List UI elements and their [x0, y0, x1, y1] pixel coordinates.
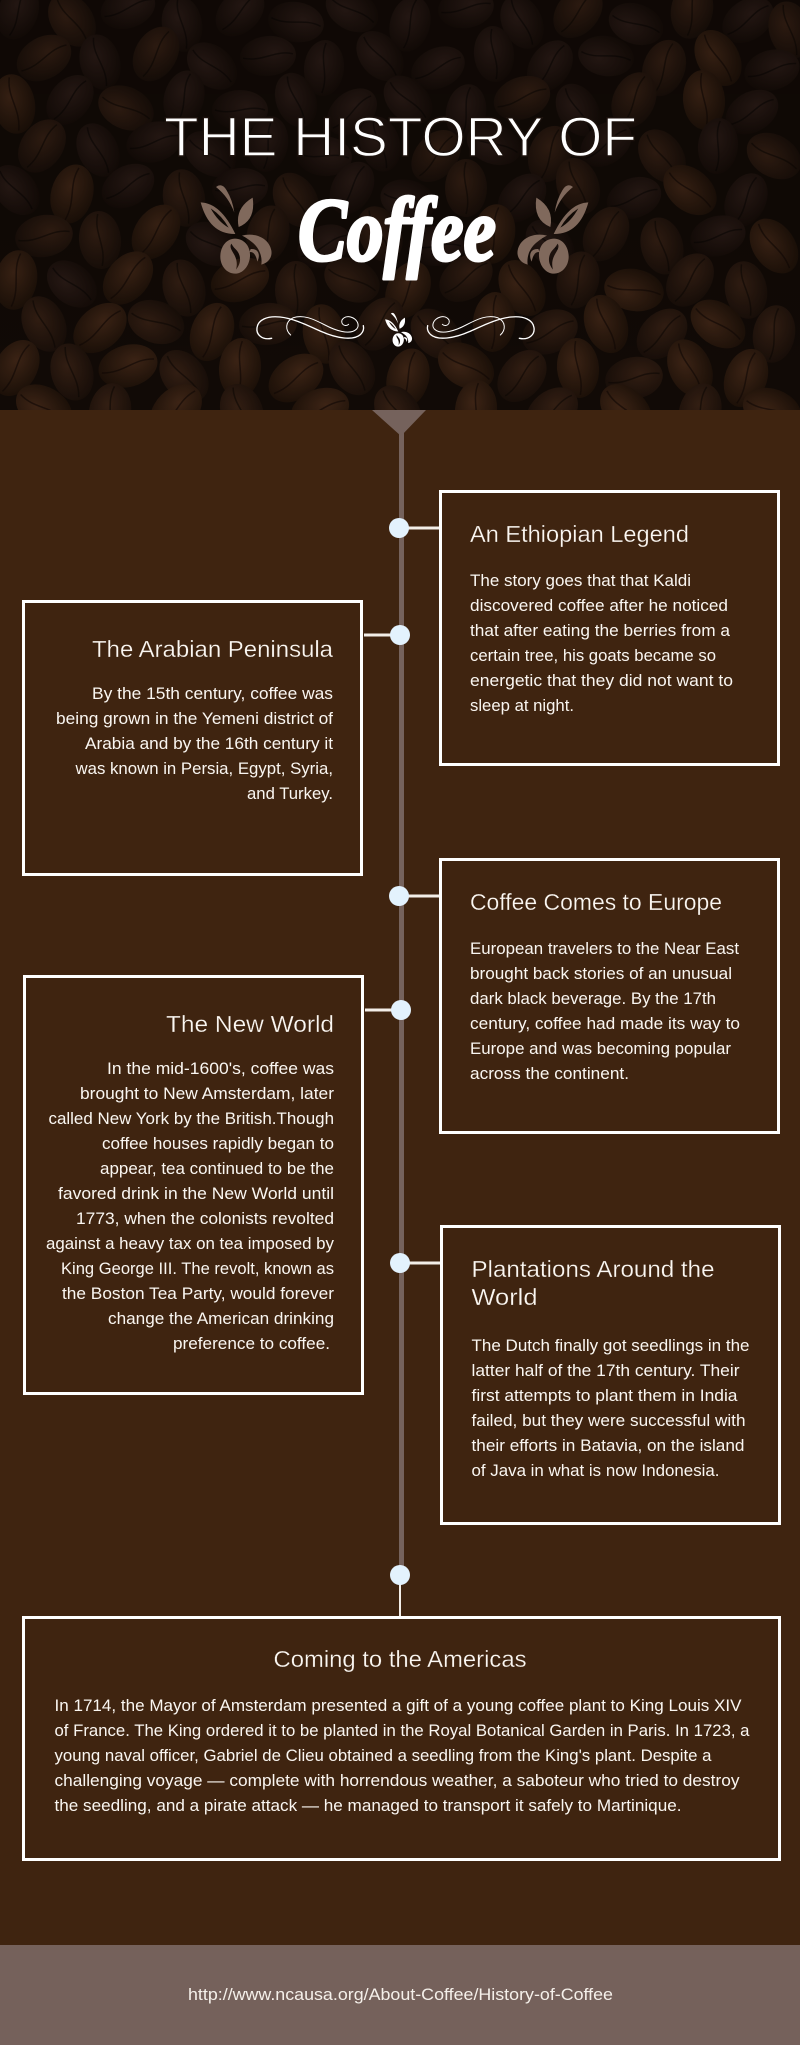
coffee beans texture	[0, 0, 800, 448]
body text: In the mid-1600's, coffee was	[107, 1059, 334, 1078]
body text: of France. The King ordered it to be planted in the Royal Botanical Garden in Paris. In 1723, a	[54, 1721, 750, 1740]
body text: century, coffee had made its way to	[470, 1014, 740, 1033]
body text: was known in Persia, Egypt, Syria,	[75, 759, 333, 778]
body text: first attempts to plant them in India	[472, 1386, 738, 1405]
body text: young naval officer, Gabriel de Clieu obtained a seedling from the King's plant. Despite a	[54, 1746, 712, 1765]
body text: European travelers to the Near East	[470, 939, 739, 958]
main timeline background	[0, 410, 800, 1945]
body text: sleep at night.	[470, 696, 574, 715]
heading: Coming to the Americas	[274, 1646, 526, 1672]
ornament: left flourish	[257, 317, 364, 339]
body text: failed, but they were successful with	[472, 1411, 746, 1430]
body text: In 1714, the Mayor of Amsterdam presented a gift of a young coffee plant to King Louis XIV	[54, 1696, 742, 1715]
body text: the seedling, and a pirate attack — he managed to transport it safely to Martinique.	[54, 1796, 682, 1815]
panel: An Ethiopian Legend	[389, 492, 778, 764]
header: coffee bean photo background with title	[0, 0, 800, 448]
body text: Arabia and by the 16th century it	[85, 734, 333, 753]
heading: An Ethiopian Legend	[470, 521, 689, 547]
footer: source link: http://www.ncausa.org/About-Coffee/History-of-Coffee	[188, 1985, 613, 2004]
body text: of Java in what is now Indonesia.	[472, 1461, 720, 1480]
body text: that after eating the berries from a	[470, 621, 731, 640]
title: The History Of: THE HISTORY OF	[164, 105, 637, 168]
ornament: right flourish	[427, 317, 534, 339]
body text: certain tree, his goats became so	[470, 646, 716, 665]
body text	[54, 1696, 750, 1815]
body text: preference to coffee.	[173, 1334, 330, 1353]
timeline spine with arrowhead	[372, 410, 426, 1568]
body text: By the 15th century, coffee was	[92, 684, 333, 703]
body text	[470, 939, 740, 1083]
icon: left coffee branch	[201, 185, 272, 274]
body text: discovered coffee after he noticed	[470, 596, 728, 615]
panel: The New World	[24, 976, 411, 1394]
body text: coffee houses rapidly began to	[102, 1134, 334, 1153]
heading: Plantations Around the	[472, 1256, 714, 1282]
body text: The Dutch finally got seedlings in the	[472, 1336, 750, 1355]
connector and dot	[390, 1253, 440, 1273]
body text: change the American drinking	[108, 1309, 334, 1328]
icon: right coffee branch	[517, 185, 588, 274]
body text: their efforts in Batavia, on the island	[472, 1436, 744, 1455]
body text: the Boston Tea Party, would forever	[62, 1284, 334, 1303]
body text	[46, 1059, 334, 1353]
heading: The Arabian Peninsula	[92, 636, 333, 662]
title: Coffee: Coffee	[298, 181, 496, 280]
icon: small coffee branch	[385, 313, 412, 347]
connector and dot	[389, 518, 439, 538]
panel: Coming to the Americas	[24, 1565, 780, 1860]
body text: called New York by the British.Though	[48, 1109, 334, 1128]
body text: and Turkey.	[247, 784, 333, 803]
heading	[472, 1256, 714, 1310]
body text: latter half of the 17th century. Their	[472, 1361, 740, 1380]
body text: energetic that they did not want to	[470, 671, 733, 690]
connector and dot	[365, 1000, 411, 1020]
heading: Coffee Comes to Europe	[470, 889, 722, 915]
connector and dot	[390, 1565, 410, 1616]
body text	[470, 571, 733, 715]
footer: source link	[0, 1945, 800, 2045]
body text: dark black beverage. By the 17th	[470, 989, 716, 1008]
body text	[56, 684, 333, 803]
connector and dot	[389, 886, 439, 906]
heading: The New World	[166, 1011, 334, 1037]
body text: brought back stories of an unusual	[470, 964, 732, 983]
body text: 1773, when the colonists revolted	[76, 1209, 334, 1228]
body text: favored drink in the New World until	[58, 1184, 334, 1203]
connector and dot	[364, 625, 410, 645]
body text	[472, 1336, 750, 1480]
panel: The Arabian Peninsula	[24, 602, 410, 874]
body text: challenging voyage — complete with horrendous weather, a saboteur who tried to destroy	[54, 1771, 740, 1790]
panel: Coffee Comes to Europe	[389, 860, 778, 1132]
body text: across the continent.	[470, 1064, 629, 1083]
body text: brought to New Amsterdam, later	[80, 1084, 334, 1103]
heading: World	[472, 1284, 538, 1310]
panel: Plantations Around the World	[390, 1226, 780, 1524]
body text: The story goes that that Kaldi	[470, 571, 691, 590]
body text: against a heavy tax on tea imposed by	[46, 1234, 334, 1253]
body text: Europe and was becoming popular	[470, 1039, 731, 1058]
body text: being grown in the Yemeni district of	[56, 709, 333, 728]
body text: appear, tea continued to be the	[100, 1159, 334, 1178]
body text: King George III. The revolt, known as	[61, 1259, 334, 1278]
